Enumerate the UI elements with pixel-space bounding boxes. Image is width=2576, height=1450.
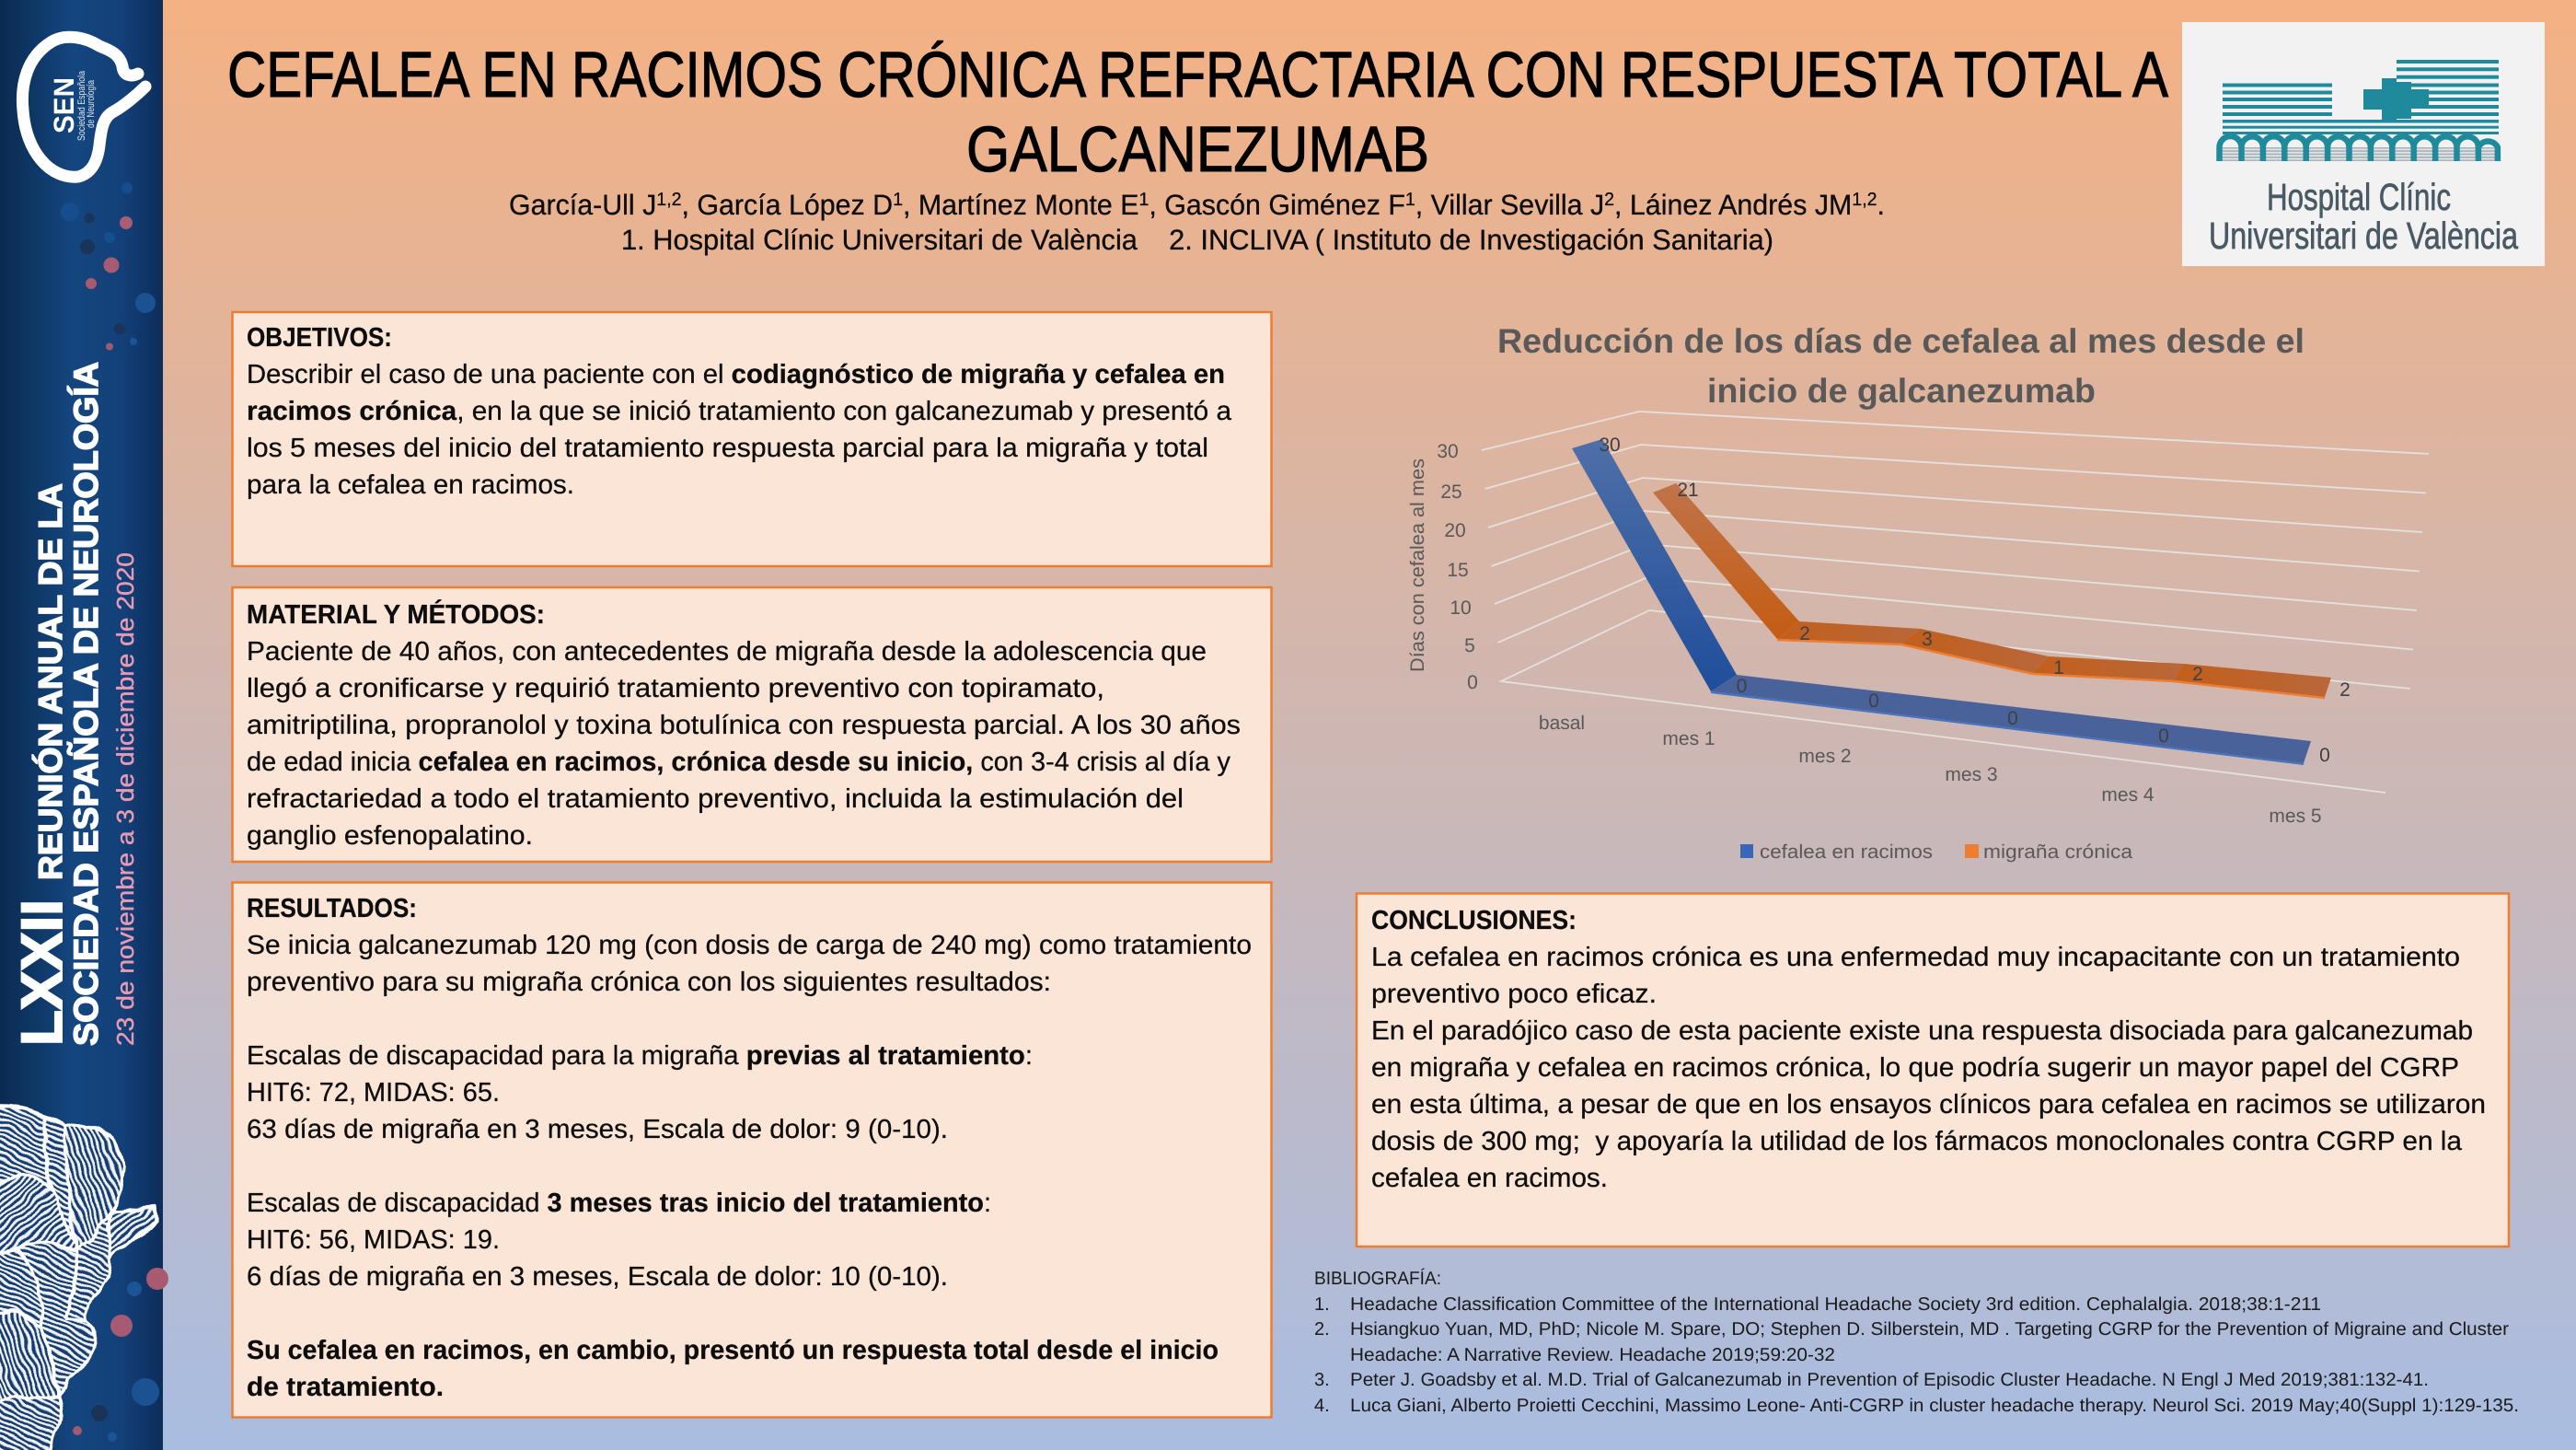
data labels: 0 [1737, 676, 1747, 697]
y axis labels: 0 [1467, 672, 1478, 693]
bibliography: Hsiangkuo Yuan, MD, PhD; Nicole M. Spare, DO; Stephen D. Silberstein, MD . Targeting CGRP for the Prevention of Migraine and Cluster [1350, 1319, 2509, 1340]
legend [1740, 841, 2132, 863]
text: objetivos body: para la cefalea en racimos. [247, 470, 574, 500]
data labels: 0 [1868, 690, 1879, 712]
authors: , Láinez Andrés JM [1614, 189, 1852, 221]
authors: 2 [1604, 190, 1614, 210]
series: migraña crónica [1653, 483, 2331, 698]
chart title: inicio de galcanezumab [1707, 372, 2096, 410]
bibliography: Headache: A Narrative Review. Headache 2019;59:20-32 [1350, 1345, 1835, 1365]
data labels: 3 [1922, 629, 1933, 650]
chart title: Reducción de los días de cefalea al mes desde el [1497, 322, 2305, 360]
icon: network dots [61, 182, 168, 1442]
authors: García-Ull J [509, 189, 660, 221]
data labels: 21 [1677, 480, 1699, 501]
x axis labels: mes 5 [2269, 806, 2322, 827]
bibliography: 3. [1314, 1370, 1330, 1390]
heading: objetivos: OBJETIVOS: [247, 323, 392, 353]
title: GALCANEZUMAB [966, 113, 1429, 185]
authors: 1 [893, 190, 903, 210]
panel: objetivos [232, 312, 1272, 566]
bibliography: 1. [1314, 1294, 1330, 1315]
title: CEFALEA EN RACIMOS CRÓNICA REFRACTARIA CON RESPUESTA TOTAL A [227, 39, 2168, 110]
authors: 1,2 [656, 190, 682, 210]
icon: hospital building [2220, 60, 2501, 161]
line chart: reduction of headache days [1407, 322, 2429, 863]
y axis labels: 5 [1464, 635, 1475, 656]
text: resultados body [247, 931, 1252, 1402]
text: material y metodos body: refractariedad a todo el tratamiento preventivo, incluida la estimulación del [247, 784, 1184, 814]
sidebar heading: reunion: REUNIÓN ANUAL DE LA [31, 483, 69, 880]
bibliography: BIBLIOGRAFÍA: [1314, 1268, 1441, 1289]
text: conclusiones body: La cefalea en racimos crónica es una enfermedad muy incapacitante con un tratamiento [1371, 943, 2460, 972]
data labels: 2 [2192, 664, 2203, 685]
x axis labels: basal [1539, 713, 1585, 734]
bibliography: 4. [1314, 1396, 1330, 1416]
data labels: 30 [1599, 435, 1621, 456]
bibliography: Headache Classification Committee of the International Headache Society 3rd edition. Cephalalgia. 2018;38:1-211 [1350, 1294, 2321, 1315]
bibliography: 2. [1314, 1319, 1330, 1340]
y axis labels: 30 [1437, 441, 1459, 462]
bibliography: Luca Giani, Alberto Proietti Cecchini, Massimo Leone- Anti-CGRP in cluster headache therapy. Neurol Sci. 2019 May;40(Suppl 1):129-135. [1350, 1396, 2519, 1416]
heading: resultados: RESULTADOS: [247, 894, 417, 923]
icon: SEN logo: Sociedad Española [76, 70, 87, 141]
text: resultados body: Escalas de discapacidad para la migraña previas al tratamiento: [247, 1041, 1033, 1071]
icon: SEN logo: SEN [48, 77, 80, 133]
text: objetivos body: racimos crónica, en la que se inició tratamiento con galcanezumab y presentó a [247, 397, 1232, 426]
text: conclusiones body: En el paradójico caso de esta paciente existe una respuesta disociada para galcanezumab [1371, 1016, 2473, 1046]
affiliations: 1. Hospital Clínic Universitari de València 2. INCLIVA ( Instituto de Investigación Sanitaria) [621, 224, 1773, 256]
authors: , Gascón Giménez F [1149, 189, 1405, 221]
sidebar heading: LXXII: LXXII [10, 899, 75, 1046]
bibliography: Peter J. Goadsby et al. M.D. Trial of Galcanezumab in Prevention of Episodic Cluster Headache. N Engl J Med 2019;381:132-41. [1350, 1370, 2429, 1390]
text: objetivos body: Describir el caso de una paciente con el codiagnóstico de migraña y cefalea en [247, 360, 1225, 389]
heading: material y metodos: MATERIAL Y MÉTODOS: [247, 599, 545, 630]
y axis labels: 25 [1440, 481, 1462, 503]
panel: material y metodos [232, 587, 1272, 862]
logo text: Hospital Clínic [2267, 176, 2451, 218]
authors: 1,2 [1852, 190, 1877, 210]
text: conclusiones body: cefalea en racimos. [1371, 1164, 1608, 1193]
y axis labels: 15 [1447, 560, 1469, 581]
data labels: 2 [1799, 623, 1810, 644]
authors: 1 [1139, 190, 1149, 210]
text: conclusiones body: en esta última, a pesar de que en los ensayos clínicos para cefalea en racimos se utilizaron [1371, 1090, 2486, 1119]
data labels: 2 [2339, 679, 2351, 701]
data labels [1599, 435, 2351, 766]
x axis labels: mes 4 [2101, 784, 2154, 806]
y axis title: Días con cefalea al mes [1407, 458, 1428, 672]
text: material y metodos body: ganglio esfenopalatino. [247, 821, 533, 851]
panel: conclusiones [1357, 893, 2509, 1247]
authors: , Martínez Monte E [903, 189, 1139, 221]
y axis labels: 20 [1444, 520, 1466, 541]
text: objetivos body [247, 360, 1232, 500]
authors: , Villar Sevilla J [1415, 189, 1604, 221]
icon: SEN logo: de Neurología [86, 79, 97, 128]
y axis labels: 10 [1450, 597, 1472, 619]
text: resultados body: preventivo para su migraña crónica con los siguientes resultados: [247, 968, 1051, 997]
text: material y metodos body: amitriptilina, propranolol y toxina botulínica con respuesta parcial. A los 30 años [247, 711, 1241, 740]
x axis labels [1539, 713, 2322, 827]
heading: conclusiones: CONCLUSIONES: [1371, 906, 1577, 935]
x axis labels: mes 1 [1662, 728, 1715, 749]
x axis labels: mes 3 [1945, 764, 1998, 785]
sidebar heading: society: SOCIEDAD ESPAÑOLA DE NEUROLOGÍA [67, 362, 105, 1046]
chart title [1497, 322, 2305, 410]
text: resultados body: Se inicia galcanezumab 120 mg (con dosis de carga de 240 mg) como tratamiento [247, 931, 1252, 960]
data labels: 0 [2007, 708, 2018, 729]
text: resultados body: 63 días de migraña en 3 meses, Escala de dolor: 9 (0-10). [247, 1115, 948, 1144]
sidebar: congress banner [0, 0, 168, 1450]
text: conclusiones body: preventivo poco eficaz. [1371, 980, 1657, 1009]
text: conclusiones body: dosis de 300 mg; y apoyaría la utilidad de los fármacos monoclonales contra CGRP en la [1371, 1127, 2463, 1156]
y axis labels [1437, 441, 1478, 693]
panel: resultados [232, 882, 1272, 1418]
title [227, 39, 2168, 185]
logo text [2209, 176, 2518, 257]
authors: . [1877, 189, 1885, 221]
text: resultados body: Escalas de discapacidad 3 meses tras inicio del tratamiento: [247, 1189, 991, 1218]
text: resultados body: 6 días de migraña en 3 meses, Escala de dolor: 10 (0-10). [247, 1262, 948, 1292]
text: objetivos body: los 5 meses del inicio del tratamiento respuesta parcial para la migraña y total [247, 434, 1208, 463]
data labels: 0 [2319, 745, 2330, 766]
text: resultados body: HIT6: 72, MIDAS: 65. [247, 1078, 500, 1108]
text: material y metodos body: llegó a cronificarse y requirió tratamiento preventivo con topiramato, [247, 674, 1104, 703]
icon: SEN logo [22, 37, 145, 177]
icon: brain illustration [0, 1106, 156, 1450]
text: resultados body: Su cefalea en racimos, en cambio, presentó un respuesta total desde el inicio [247, 1336, 1219, 1365]
x axis labels: mes 2 [1798, 746, 1852, 767]
authors: 1 [1405, 190, 1415, 210]
text: conclusiones body: en migraña y cefalea en racimos crónica, lo que podría sugerir un mayor papel del CGRP [1371, 1053, 2459, 1083]
text: material y metodos body [247, 637, 1241, 851]
legend: cefalea en racimos [1760, 841, 1933, 863]
data labels: 0 [2158, 725, 2169, 747]
legend: migraña crónica [1983, 841, 2132, 863]
sidebar dates: 23 de noviembre a 3 de diciembre de 2020 [111, 552, 139, 1046]
authors: , García López D [682, 189, 893, 221]
text: resultados body: HIT6: 56, MIDAS: 19. [247, 1225, 500, 1255]
bibliography [1314, 1268, 2519, 1416]
data labels: 1 [2053, 657, 2064, 679]
text: material y metodos body: de edad inicia cefalea en racimos, crónica desde su inicio, con 3-4 crisis al día y [247, 748, 1230, 777]
series: cefalea en racimos [1572, 439, 2311, 764]
text: material y metodos body: Paciente de 40 años, con antecedentes de migraña desde la adolescencia que [247, 637, 1207, 667]
logo: Hospital Clínic [2182, 22, 2545, 266]
text: resultados body: de tratamiento. [247, 1373, 444, 1402]
text: conclusiones body [1371, 943, 2486, 1193]
